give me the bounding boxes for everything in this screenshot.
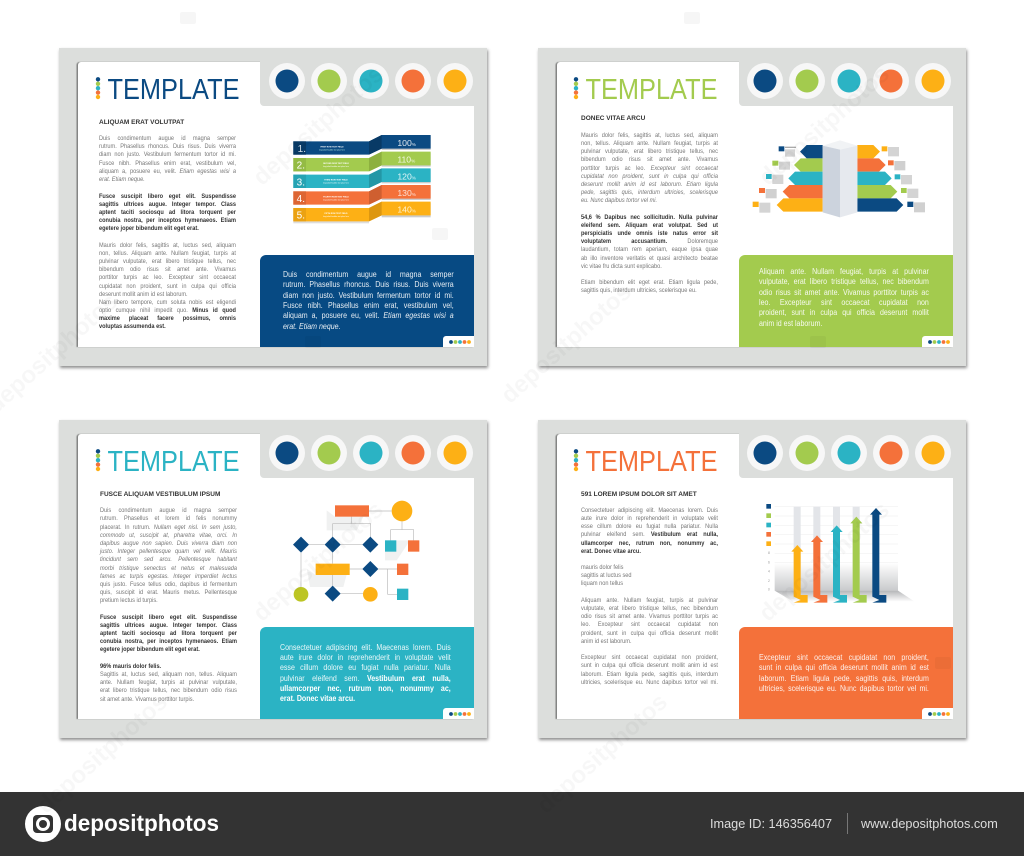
ribbon row 3: long tailed headline text place here: [323, 182, 349, 185]
text block: bold: ab illo inventore veritatis et quasi architecto beatae: [581, 255, 718, 262]
callout box navy: [260, 254, 474, 347]
watermark camera: [810, 336, 826, 348]
ribbon row 1: 1.: [298, 144, 306, 155]
watermark: depositphotos: [532, 688, 673, 819]
text block: closing: sagittis quis, interdum ultricies, scelerisque eu.: [581, 287, 697, 294]
legend: [767, 504, 771, 592]
divider: [847, 813, 848, 834]
ribbon row 2: 110%: [397, 155, 415, 165]
callout text green: odio risus sit amet ante. Vivamus porttitor turpis ac: [759, 288, 929, 297]
text block: intro: diam non justo. Vestibulum fermentum tortor id mi.: [99, 151, 236, 158]
right labels: [882, 147, 925, 213]
text block: intro: quis justo. Fusce tellus odio, dapibus id fermentum: [100, 581, 237, 588]
text block: intro: tincidunt sem sed arcu. Pellentesque habitant: [100, 556, 237, 563]
text block: bold: aptent taciti sociosqu ad litora torquent per: [99, 209, 236, 216]
text block: closing: porttitor turpis ac leo. Excepteur sint occaecat: [99, 274, 236, 281]
ribbon row 4: long tailed headline text place here: [323, 199, 349, 202]
text block: intro: commodo ut, suscipit at, pharetra vitae, orci. In: [100, 532, 237, 539]
text block: bold: vic vitae fru dicta sunt explicabo.: [581, 263, 662, 270]
title: template orange: TEMPLATE: [586, 446, 718, 478]
callout text teal: erat. Donec vitae arcu.: [280, 694, 355, 703]
arrow: green: [851, 517, 867, 603]
arrow: yellow: [792, 545, 808, 603]
callout text orange: [759, 653, 929, 693]
callout text green: proident, sunt in culpa qui officia deserunt mollit: [759, 308, 929, 317]
text block: list: liquam non tellus: [581, 580, 623, 587]
ribbon row 2: SECOND ROW TEXT FIELD: [323, 163, 349, 165]
callout text green: vulputate, erat libero tristique tellus, nec bibendum: [759, 277, 929, 286]
watermark camera: [180, 12, 196, 24]
text block: intro: aute irure dolor in reprehenderit in voluptate velit: [581, 515, 718, 522]
colour swatches: [269, 63, 473, 99]
text block: closing: laborum. Etiam ligula pede, sagittis quis, interdum: [581, 671, 718, 678]
ribbon chart: [293, 135, 431, 224]
watermark: depositphotos: [32, 688, 173, 819]
text block: bold: Fusce suscipit libero eget elit. Suspendisse: [99, 193, 236, 200]
text block: intro: fames ac turpis egestas. Integer imperdiet lectus: [100, 573, 237, 580]
watermark: depositphotos: [754, 496, 895, 627]
legend: 0: [768, 588, 770, 592]
text block: bold: sagittis ultrices augue. Integer tempor. Class: [100, 622, 237, 629]
ribbon row 4: 130%: [397, 188, 416, 198]
ribbon row 3: 3.: [297, 178, 305, 189]
text block: intro: [580, 132, 718, 204]
text block: intro: rutrum. Phasellus et lorem id felis nonummy: [100, 515, 237, 522]
ribbon row 1: 100%: [397, 138, 416, 148]
text block: closing: non, tellus. Aliquam ante. Nullam feugiat, turpis at: [99, 250, 236, 257]
text block: closing: sunt in culpa qui officia deserunt mollit anim id est: [581, 662, 718, 669]
text block: intro: [99, 135, 236, 183]
text block: bold: laudantium, totam rem aperiam, eaque ipsa quae: [581, 246, 718, 253]
legend: 8: [768, 551, 770, 555]
heading: 591 LOREM IPSUM DOLOR SIT AMET: [581, 491, 697, 498]
page marker: [922, 708, 953, 719]
text block: intro: porttitor turpis ac leo. Excepteur sint occaecat: [581, 165, 718, 172]
arrow: teal: [831, 525, 847, 603]
ribbon row 4: 4.: [297, 194, 305, 205]
arrow: orange: [811, 535, 828, 603]
footer bar: [0, 792, 1024, 856]
text block: closing: maxime placeat facere possimus, omnis: [99, 315, 236, 322]
ribbon row 1: FIRST ROW TEXT FIELD: [320, 147, 344, 149]
text block: bold: eleifend sem. Aliquam erat volutpat. Sed ut: [581, 222, 718, 229]
ribbon row 3: [293, 169, 431, 189]
text block: closing: [99, 242, 236, 330]
text block: closing: Nam libero tempore, cum soluta nobis est eligendi: [99, 299, 236, 306]
callout text teal: esse cillum dolore eu fugiat nulla pariatur. Nulla: [280, 663, 451, 672]
heading: ALIQUAM ERAT VOLUTPAT: [99, 119, 184, 126]
text block: closing: voluptas assumenda est.: [99, 323, 166, 330]
callout text teal: [280, 642, 451, 703]
ribbon row 5: [293, 202, 431, 224]
text block: bold: conubia nostra, per inceptos hymenaeos. Etiam: [99, 217, 236, 224]
logo: [25, 806, 219, 842]
text block: intro: eu. Nunc dapibus tortor vel mi.: [581, 197, 657, 204]
legend: 6: [768, 560, 770, 564]
text block: intro: Duis condimentum augue id magna semper: [99, 135, 236, 142]
text block: intro: erat. Etiam neque.: [99, 176, 145, 183]
callout text orange: Excepteur sint occaecat cupidatat non proident,: [759, 653, 929, 662]
page marker: [922, 336, 953, 347]
text block: intro: esse cillum dolore eu fugiat nulla pariatur. Nulla: [581, 523, 718, 530]
callout text navy: rutrum. Phasellus rhoncus. Duis risus. Duis viverra: [283, 280, 454, 289]
callout text teal: pulvinar eleifend sem. Vestibulum erat nulla,: [280, 674, 451, 683]
text block: bold: Fusce suscipit libero eget elit. Suspendisse: [100, 614, 237, 621]
legend: 2: [768, 579, 770, 583]
text block: intro: rutrum. Phasellus rhoncus. Duis risus. Duis viverra: [99, 143, 236, 150]
text block: intro: Mauris dolor felis, sagittis at, luctus sed, aliquam: [581, 132, 718, 139]
title: template teal: TEMPLATE: [108, 446, 240, 478]
callout text navy: Fusce nibh. Phasellus enim erat, vestibulum vel,: [283, 301, 454, 310]
text block: bold: aptent taciti sociosqu ad litora torquent per: [100, 630, 237, 637]
ribbon row 3: THIRD ROW TEXT FIELD: [324, 180, 348, 182]
long shadows: [307, 505, 410, 587]
title: template green: TEMPLATE: [586, 74, 718, 106]
text block: bold: egetere joper bibendum elit eget erat.: [100, 646, 200, 653]
ribbon row 2: long tailed headline text place here: [323, 165, 349, 168]
watermark: depositphotos: [248, 496, 389, 627]
ribbon row 5: FIFTH ROW TEXT FIELD: [325, 213, 348, 215]
text block: closing: Excepteur sint occaecat cupidatat non proident,: [581, 654, 718, 661]
callout text orange: sunt in culpa qui officia deserunt mollit anim id est: [759, 663, 929, 672]
text block: bold: [581, 214, 718, 270]
text block: bold: voluptatem accusantium. Doloremque: [581, 238, 718, 245]
website: www.depositphotos.com: [861, 817, 998, 831]
text block: middle: [581, 597, 718, 645]
flow diamonds: [293, 536, 378, 601]
ribbon row 1: long tailed headline text place here: [319, 149, 345, 152]
image id: Image ID: 146356407: [710, 817, 832, 831]
text block: intro: pede, sagittis quis, interdum ultricies, scelerisque: [581, 189, 718, 196]
text block: intro: justo. Integer pellentesque quam vel velit. Mauris: [100, 548, 237, 555]
watermark: depositphotos: [496, 278, 637, 409]
text block: middle: Aliquam ante. Nullam feugiat, turpis at pulvinar: [581, 597, 718, 604]
callout text navy: erat. Etiam neque.: [283, 322, 341, 331]
text block: closing: ante. Nullam feugiat, turpis at pulvinar vulputate,: [100, 679, 237, 686]
text block: middle: vulputate, erat libero tristique tellus, nec bibendum: [581, 605, 718, 612]
callout text navy: Duis condimentum augue id magna semper: [283, 270, 454, 279]
watermark: depositphotos: [248, 60, 389, 191]
prism arrow chart: [752, 140, 925, 218]
text block: list: sagittis at luctus sed: [581, 572, 632, 579]
connectors: [301, 511, 414, 594]
watermark camera: [432, 228, 448, 240]
text block: intro: pulvinar eleifend sem. Vestibulum erat nulla,: [581, 531, 718, 538]
page marker: [443, 708, 474, 719]
callout box teal: [260, 626, 474, 719]
flow boxes: [316, 505, 419, 600]
colour swatches: [747, 435, 951, 471]
callout text navy: aliquam a, posuere eu, velit. Etiam egestas wisi a: [283, 311, 454, 320]
page marker: [443, 336, 474, 347]
title: template navy: TEMPLATE: [108, 74, 240, 106]
text block: closing: bibendum odio risus sit amet ante. Vivamus: [99, 266, 236, 273]
text block: intro: placerat. In rutrum. Nullam eget nisl. In sem justo,: [100, 524, 237, 531]
panel: template page teal: [59, 420, 487, 738]
text block: list: mauris dolor felis: [581, 564, 623, 571]
callout text navy: [283, 270, 454, 331]
arrow bar chart: [766, 504, 912, 603]
text block: closing: deserunt mollit anim id est laborum.: [99, 291, 188, 298]
ribbon row 5: long tailed headline text place here: [323, 215, 349, 218]
text block: bold: egetere joper bibendum elit eget erat.: [99, 225, 199, 232]
callout text green: [759, 267, 929, 328]
text block: closing: Mauris dolor felis, sagittis at, luctus sed, aliquam: [99, 242, 236, 249]
ribbon row 5: 5.: [297, 211, 305, 222]
callout text green: Aliquam ante. Nullam feugiat, turpis at pulvinar: [759, 267, 929, 276]
text block: intro: non, tellus. Aliquam ante. Nullam feugiat, turpis at: [581, 140, 718, 147]
text block: bold: conubia nostra, per inceptos hymenaeos. Etiam: [100, 638, 237, 645]
left arrows: [777, 145, 823, 212]
colour swatches: [747, 63, 951, 99]
text block: closing: [100, 663, 237, 703]
text block: middle: anim id est laborum.: [581, 638, 632, 645]
flow circles: [294, 500, 412, 601]
right arrows: [857, 145, 903, 212]
ribbon row 3: 120%: [397, 172, 416, 182]
ribbon row 1: [293, 135, 431, 155]
text block: middle: odio risus sit amet ante. Vivamus porttitor turpis ac: [581, 613, 718, 620]
left labels: [753, 147, 796, 213]
text block: bold: sagittis ultrices augue. Integer tempor. Class: [99, 201, 236, 208]
watermark camera: [305, 336, 321, 348]
arrow: navy: [870, 508, 887, 603]
watermark: depositphotos: [754, 60, 895, 191]
text block: middle: proident, sunt in culpa qui officia deserunt mollit: [581, 630, 718, 637]
text block: intro: morbi tristique senectus et netus et malesuada: [100, 564, 237, 572]
text block: closing: Sagittis at, luctus sed, aliquam non, tellus. Aliquam: [100, 671, 237, 678]
chart grid and wall: [775, 507, 915, 602]
ribbon row 2: [293, 152, 431, 172]
text block: intro: ullamcorper nec, rutrum non, nonummy ac,: [581, 540, 718, 547]
text block: intro: Duis condimentum augue id magna semper: [100, 507, 237, 514]
panel: template page navy: [59, 48, 487, 366]
text block: intro: aliquam a, posuere eu, velit. Etiam egestas wisi a: [99, 168, 236, 175]
callout text green: leo. Excepteur sint occaecat cupidatat non: [759, 298, 929, 307]
callout box orange: [739, 626, 953, 719]
callout text orange: laborum. Etiam ligula pede, sagittis quis, interdum: [759, 674, 929, 683]
text block: closing: cupidatat non proident, sunt in culpa qui officia: [99, 283, 236, 290]
text block: closing: Etiam bibendum elit eget erat. Etiam ligula pede,: [581, 279, 718, 286]
ribbon row 4: [293, 185, 431, 205]
text block: intro: [581, 507, 718, 555]
text block: intro: deserunt mollit anim id est laborum. Etiam ligula: [581, 181, 718, 188]
text block: intro: pulvinar vulputate, erat libero tristique tellus, nec: [581, 148, 718, 155]
callout text green: anim id est laborum.: [759, 319, 822, 328]
text block: closing: [581, 654, 718, 686]
text block: intro: [99, 507, 238, 604]
callout text teal: aute irure dolor in reprehenderit in voluptate velit: [280, 653, 451, 662]
text block: bold: [99, 193, 236, 232]
text block: bold: perspiciatis unde omnis iste natus error sit: [581, 230, 718, 237]
text block: intro: erat. Donec vitae arcu.: [581, 548, 641, 555]
text block: closing: ultricies, scelerisque eu. Nunc dapibus tortor vel mi.: [581, 679, 718, 686]
watermark camera: [935, 657, 951, 669]
text block: intro: Fusce nibh. Phasellus enim erat, vestibulum vel,: [99, 160, 236, 167]
text block: closing: optio cumque nihil impedit quo. Minus id quod: [99, 307, 236, 314]
background columns: [794, 507, 860, 591]
text block: closing: 96% mauris dolor felis.: [100, 663, 161, 670]
text block: list: [581, 564, 632, 587]
text block: closing: sit amet ante. Vivamus porttitor turpis.: [100, 696, 194, 703]
legend: 4: [768, 570, 770, 574]
text block: intro: quis, suscipit id erat. Mauris metus. Pellentesque: [100, 589, 237, 596]
callout box green: [739, 254, 953, 347]
central prism: [823, 141, 857, 218]
watermark camera: [684, 12, 700, 24]
heading: FUSCE ALIQUAM VESTIBULUM IPSUM: [100, 491, 220, 498]
panel: template page orange: [538, 420, 966, 738]
text block: closing: pulvinar vulputate, erat libero tristique tellus, nec: [99, 258, 236, 265]
colour swatches: [269, 435, 473, 471]
text block: bold: [100, 614, 237, 653]
text block: intro: bibendum odio risus sit amet ante. Vivamus: [581, 156, 718, 163]
text block: intro: dapibus augue non sapien. Duis viverra diam non: [100, 540, 237, 547]
text block: closing: erat libero tristique tellus, nec bibendum odio risus: [100, 687, 237, 694]
ribbon row 5: 140%: [397, 205, 416, 215]
panel: template page green: [538, 48, 966, 366]
flowchart: [293, 500, 420, 602]
callout text orange: ultricies, scelerisque eu. Nunc dapibus tortor vel mi.: [759, 684, 929, 693]
text block: closing: [581, 279, 718, 294]
heading: DONEC VITAE ARCU: [581, 115, 645, 122]
logo: depositphotos: [64, 810, 219, 836]
ribbon row 4: FOURTH ROW TEXT FIELD: [323, 197, 349, 199]
ribbon row 2: 2.: [297, 161, 305, 172]
text block: intro: Consectetuer adipiscing elit. Maecenas lorem. Duis: [581, 507, 718, 514]
text block: middle: leo. Excepteur sint occaecat cupidatat non: [581, 621, 718, 628]
callout text navy: diam non justo. Vestibulum fermentum tortor id mi.: [283, 291, 454, 300]
callout text teal: ullamcorper nec, rutrum non, nonummy ac,: [280, 684, 451, 693]
callout text teal: Consectetuer adipiscing elit. Maecenas lorem. Duis: [280, 642, 451, 652]
text block: intro: cupidatat non proident, sunt in culpa qui officia: [581, 173, 718, 180]
text block: intro: pretium lectus id turpis.: [100, 597, 158, 604]
text block: bold: 54,6 % Dapibus nec sollicitudin. Nulla pulvinar: [581, 214, 718, 221]
